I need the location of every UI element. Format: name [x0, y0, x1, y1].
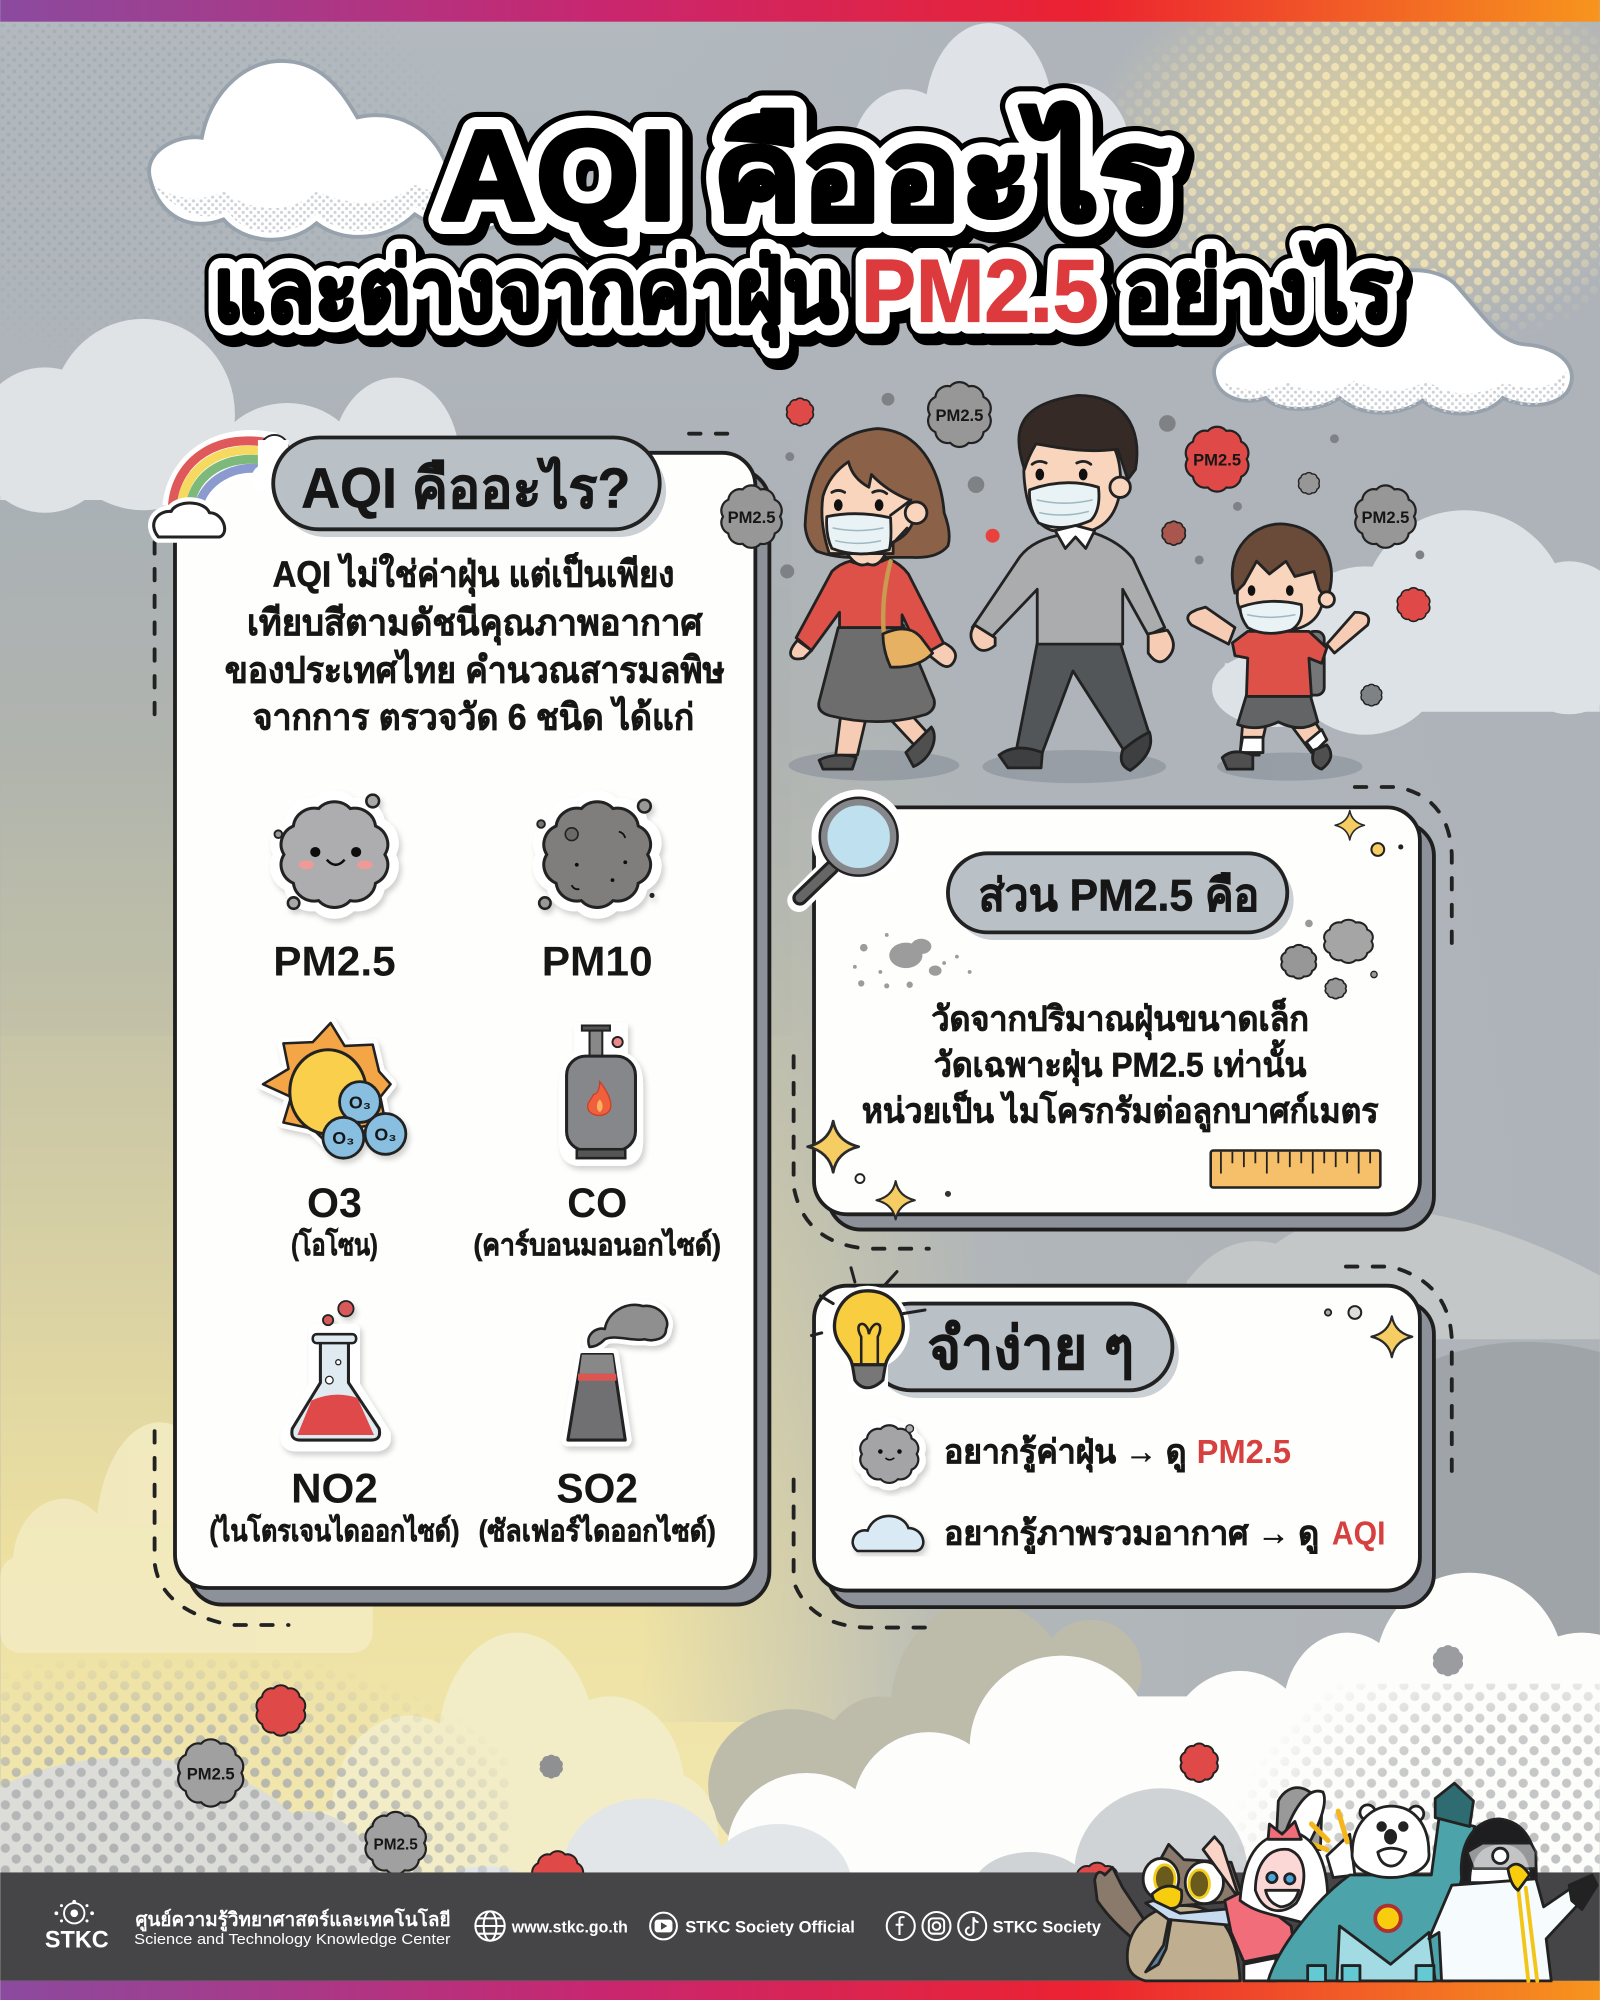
pollutant: NO2: NO2 [291, 1465, 378, 1512]
icon: cloud [853, 1516, 923, 1551]
website [475, 1911, 628, 1941]
title: อย่างไร [1123, 240, 1393, 340]
halftone: bottom left [0, 1658, 510, 1872]
pollutant: SO2: (ซัลเฟอร์ไดออกไซด์) [479, 1514, 716, 1548]
particle: PM2.5 grey right [1355, 485, 1416, 548]
footer band [0, 1872, 1600, 1981]
panel shadow [828, 823, 1434, 1230]
pollutant: O3: O3 [307, 1179, 362, 1226]
icon: flask [286, 1301, 386, 1446]
airborne particles [178, 382, 1463, 1918]
website: www.stkc.go.th [511, 1917, 628, 1936]
organisation name: Science and Technology Knowledge Center [134, 1932, 451, 1948]
icon: sun with ozone: O₃ [332, 1128, 354, 1148]
mascot: penguin [1429, 1819, 1597, 1981]
heading pill: PM2.5 [948, 853, 1294, 940]
mascot: rabbit girl [1203, 1821, 1328, 1981]
panel: PM2.5 [799, 790, 1434, 1230]
row: air overview: อยากรู้ภาพรวมอากาศ → ดู [944, 1516, 1319, 1555]
logo: STKC: STKC [45, 1927, 109, 1954]
icon: sun with ozone [263, 1023, 406, 1158]
pollutant: PM10: PM10 [542, 938, 653, 985]
pollutant: CO: (คาร์บอนมอนอกไซด์) [473, 1228, 721, 1262]
mascot: bear [1268, 1783, 1475, 1981]
cloud: cream upper left [0, 1422, 373, 1653]
cloud: left mid pale [0, 319, 472, 541]
dashed connector lines [155, 434, 1452, 1628]
mascots [1095, 1783, 1597, 1981]
illustration: family in masks [789, 395, 1369, 783]
icon: ruler [1211, 1151, 1380, 1188]
bottom colour bar [0, 1981, 1600, 2000]
icon: smiling dust [274, 793, 395, 915]
row: dust: PM2.5 [1197, 1434, 1291, 1471]
social media [887, 1912, 1102, 1940]
cloud: grey hill behind mascots [973, 1788, 1248, 1957]
text block: definition: จากการ ตรวจวัด 6 ชนิด ได้แก่ [253, 696, 694, 738]
icon: factory chimney [568, 1305, 667, 1440]
icon: rainbow [154, 435, 289, 537]
YouTube [650, 1913, 855, 1939]
pollutant: NO2 [209, 1301, 459, 1548]
cloud: cream centre [319, 1633, 718, 1907]
pollutant: CO [473, 1023, 721, 1262]
pollutant: SO2: SO2 [556, 1465, 638, 1512]
heading pill: จำง่าย ๆ: จำง่าย ๆ [928, 1317, 1134, 1382]
title: AQI คืออะไร [440, 102, 1170, 247]
panel shadow [828, 1301, 1434, 1607]
row: air overview: AQI [1332, 1516, 1385, 1553]
particles: bottom: PM2.5 [187, 1764, 235, 1783]
title: และต่างจากค่าฝุ่น [213, 240, 838, 346]
row: dust [857, 1422, 1291, 1487]
icon: rough dust [537, 795, 658, 915]
cloud: white top left [149, 61, 536, 240]
father [971, 395, 1173, 770]
icon: magnifier [799, 790, 906, 901]
text block: PM2.5: วัดเฉพาะฝุ่น PM2.5 เท่านั้น [934, 1040, 1307, 1087]
heading pill: PM2.5: ส่วน PM2.5 คือ [979, 872, 1259, 921]
heading pill: AQI คืออะไร?: AQI คืออะไร? [301, 456, 630, 520]
YouTube: STKC Society Official [685, 1917, 855, 1936]
panel body [814, 1286, 1420, 1591]
title: PM2.5 [861, 240, 1098, 340]
text block: definition: เทียบสีตามดัชนีคุณภาพอากาศ [247, 602, 703, 646]
cloud: hazy left bottom [0, 1758, 383, 1990]
row: air overview [853, 1516, 1385, 1555]
icon: dust [857, 1422, 922, 1487]
pollutant: NO2: (ไนโตรเจนไดออกไซด์) [209, 1513, 459, 1548]
cloud: right mid pale [1212, 510, 1600, 735]
pollutant: PM10 [537, 795, 658, 985]
particle: PM2.5 on panel edge [721, 485, 782, 548]
icon: sun with ozone: O₃ [374, 1124, 397, 1144]
pollutant: O3: (โอโซน) [291, 1227, 378, 1262]
icon: dust cluster [1281, 920, 1377, 999]
panel body [175, 453, 755, 1588]
mother [791, 429, 956, 769]
title: PM2.5 [866, 247, 1104, 347]
row: dust: อยากรู้ค่าฝุ่น → ดู [944, 1434, 1186, 1473]
title: และต่างจากค่าฝุ่น [213, 240, 838, 346]
title: อย่างไร [1128, 247, 1398, 347]
pollutant: CO: CO [567, 1179, 627, 1226]
text block: definition: AQI ไม่ใช่ค่าฝุ่น แต่เป็นเพียง [273, 552, 674, 598]
particle: PM2.5 grey top: PM2.5 [935, 406, 983, 425]
top colour bar [0, 0, 1600, 22]
cloud: lower right faint [1186, 1211, 1600, 1339]
text block: PM2.5 [862, 997, 1379, 1132]
title: AQI คืออะไร [445, 109, 1175, 254]
panel: AQI definition [154, 435, 782, 1605]
ground shadows [789, 750, 1362, 783]
sparkle and dots [1325, 1306, 1412, 1357]
particles: bottom: PM2.5 [374, 1836, 418, 1853]
cloud: right dark [1422, 1342, 1600, 1658]
title [213, 102, 1398, 353]
title: อย่างไร [1123, 240, 1393, 340]
icon: sun with ozone: O₃ [349, 1092, 371, 1112]
pollutant: PM2.5: PM2.5 [273, 938, 396, 985]
cloud: pale behind title [852, 23, 1129, 217]
title: อย่างไร [1123, 240, 1393, 340]
title: PM2.5 [861, 240, 1098, 340]
child [1188, 524, 1369, 769]
text block: PM2.5: วัดจากปริมาณฝุ่นขนาดเล็ก [931, 997, 1309, 1041]
panel: easy to remember [811, 1268, 1434, 1607]
heading pill: AQI คืออะไร? [273, 438, 666, 537]
particle: PM2.5 red: PM2.5 [1193, 451, 1241, 470]
text block: PM2.5: หน่วยเป็น ไมโครกรัมต่อลูกบาศก์เมตร [862, 1088, 1379, 1132]
logo: STKC [45, 1900, 109, 1954]
title: PM2.5 [861, 240, 1098, 340]
grey dust specks [540, 393, 1463, 1779]
cloud: white top right [1214, 270, 1572, 414]
icon: light bulb [811, 1268, 925, 1395]
text block: definition [225, 552, 725, 738]
particle: PM2.5 red [1186, 427, 1248, 492]
red dust specks [787, 398, 1430, 621]
particles: bottom [178, 1685, 1218, 1918]
title: AQI คืออะไร [440, 102, 1170, 247]
organisation name: ศูนย์ความรู้วิทยาศาสตร์และเทคโนโลยี [135, 1908, 451, 1932]
organisation name [134, 1908, 451, 1948]
pollutant: O3 [263, 1023, 406, 1262]
heading pill: จำง่าย ๆ [868, 1304, 1179, 1398]
panel shadow [189, 469, 769, 1605]
particle: PM2.5 grey top [928, 382, 991, 447]
social media: STKC Society [993, 1917, 1102, 1936]
particle: PM2.5 grey right: PM2.5 [1361, 508, 1409, 527]
sparkles [808, 811, 1403, 1219]
cloud: grey hills bottom [434, 1798, 852, 1952]
icon: fine dust specks [853, 933, 972, 989]
title: และต่างจากค่าฝุ่น [218, 247, 843, 353]
halftone: bottom right [1212, 1684, 1600, 1872]
icon: gas cylinder [559, 1023, 643, 1166]
particle: PM2.5 on panel edge: PM2.5 [728, 508, 775, 527]
cloud: olive grey right of centre [708, 1601, 1142, 1862]
pollutant: SO2 [479, 1305, 716, 1548]
text block: definition: ของประเทศไทย คำนวณสารมลพิษ [225, 648, 725, 690]
title: AQI คืออะไร [440, 102, 1170, 247]
cloud: big white bottom [727, 1573, 1600, 1926]
pollutant: PM2.5 [273, 793, 396, 985]
panel body [814, 807, 1420, 1214]
title: และต่างจากค่าฝุ่น [213, 240, 838, 346]
mascot: owl [1095, 1844, 1244, 1981]
mascot: sausage behind [1276, 1788, 1355, 1878]
